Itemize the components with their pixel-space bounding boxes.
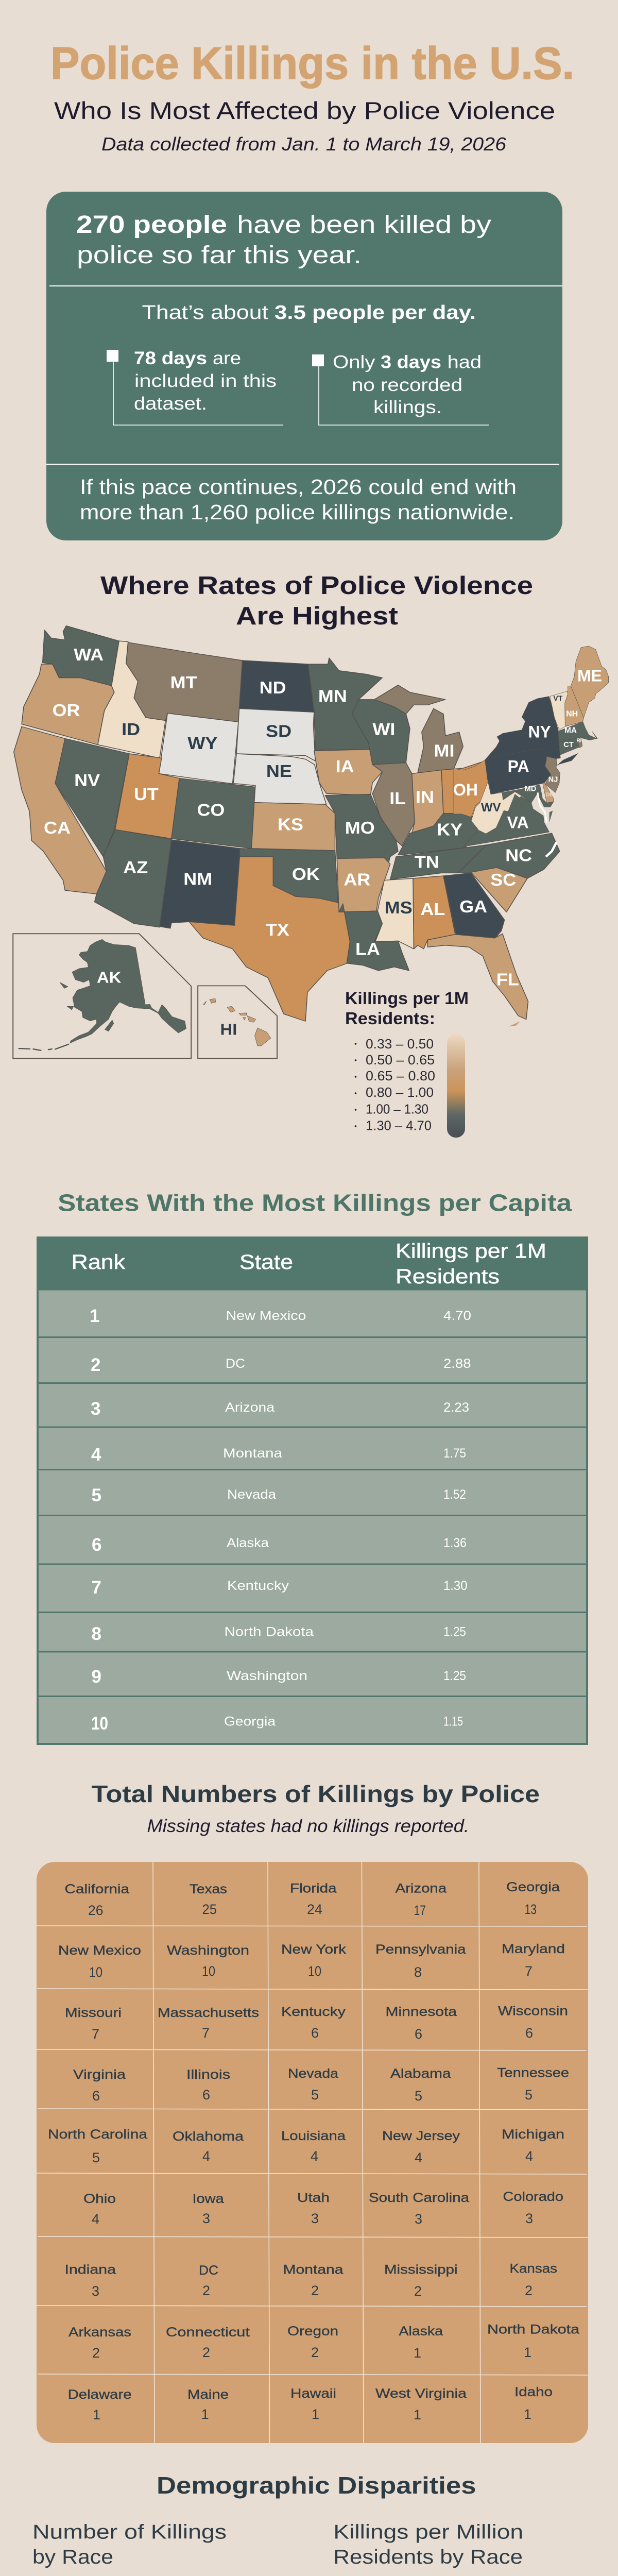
row 7 cells: Mississippi (384, 2263, 457, 2277)
inset frames (13, 934, 191, 1058)
row 9 cells: Delaware (68, 2387, 132, 2402)
row 3 cells (65, 2004, 568, 2042)
Alaska and Hawaii insets: AK (97, 968, 122, 986)
row 5: Nevada (227, 1487, 276, 1502)
row 4 cells: Alabama (390, 2066, 451, 2081)
row 3 cells: Kentucky (281, 2005, 346, 2019)
row 8: 8 (92, 1624, 101, 1644)
northeast states: MD (525, 785, 536, 793)
map legend: 0.33 – 0.50 (366, 1036, 434, 1052)
projection text: more than 1,260 police killings nationwide. (80, 500, 514, 524)
choropleth map of US: NM (183, 870, 212, 889)
map legend: 0.80 – 1.00 (366, 1084, 434, 1100)
row 3: 2.23 (443, 1400, 469, 1415)
callout: 78 days: included in this (134, 371, 277, 391)
row 9 cells: 1 (201, 2406, 209, 2422)
northeast states: NH (566, 710, 578, 719)
table: states with most killings per capita (37, 1238, 588, 1744)
row 9 cells: 1 (524, 2406, 531, 2422)
projection text (80, 475, 517, 524)
row 9 cells: 1 (312, 2406, 319, 2422)
row 3 cells: 7 (92, 2026, 99, 2042)
choropleth map of US: NV (74, 771, 100, 790)
row 9 (92, 1667, 466, 1687)
row 3 (91, 1399, 469, 1419)
row 6 cells (83, 2190, 563, 2227)
map legend: Residents: (345, 1009, 435, 1028)
northeast states: VT (553, 694, 563, 702)
row 4 cells: Tennessee (497, 2066, 569, 2080)
callout: 3 days: Only (333, 352, 375, 372)
table header: Residents (396, 1265, 500, 1288)
headline stat: 270 people (76, 211, 227, 239)
row 9 cells: Idaho (514, 2385, 553, 2399)
row 8 cells: Connecticut (166, 2325, 250, 2340)
grid: killings by state (37, 1862, 588, 2443)
row 4: 4 (91, 1445, 101, 1465)
row 8 cells: Alaska (399, 2324, 443, 2338)
row 8 cells: Oregon (287, 2324, 338, 2338)
header (50, 38, 574, 155)
row 7 cells: Montana (283, 2263, 344, 2277)
row 9: 9 (92, 1667, 101, 1687)
row 6 (92, 1535, 467, 1555)
choropleth map of US: OR (53, 701, 80, 720)
row 2 cells: 10 (308, 1963, 321, 1979)
row 2 cells: 10 (89, 1964, 102, 1980)
row 4 cells: Virginia (73, 2067, 126, 2082)
callout: 3 days: no recorded (352, 375, 462, 395)
row 4 cells: Illinois (186, 2067, 230, 2082)
row 5 cells: 4 (415, 2150, 422, 2165)
northeast states: CT (563, 741, 574, 749)
subheading: number of killings by race (32, 2521, 227, 2568)
row 1 cells: Arizona (396, 1882, 447, 1896)
row 1: New Mexico (226, 1309, 306, 1323)
northeast states: WV (481, 801, 501, 815)
choropleth map of US: IA (336, 757, 354, 776)
row 3 cells: Massachusetts (158, 2006, 259, 2020)
choropleth map of US: ID (122, 721, 140, 739)
map legend: Killings per 1M (345, 989, 469, 1008)
row 8: 1.25 (443, 1625, 466, 1639)
row 3 cells: 6 (311, 2025, 319, 2041)
row 3: Arizona (225, 1400, 274, 1415)
row 5 cells: North Carolina (48, 2127, 147, 2142)
Alaska and Hawaii insets: HI (220, 1020, 237, 1038)
row 8 cells: 1 (524, 2345, 531, 2360)
panel: summary stats (46, 192, 562, 540)
choropleth map of US: MT (170, 673, 197, 692)
row 7 (92, 1578, 468, 1598)
heading: total numbers: Missing states had no killings reported. (147, 1816, 469, 1836)
table header: Rank (71, 1251, 126, 1274)
row 5 cells: Louisiana (281, 2129, 346, 2143)
row 3 cells: Missouri (65, 2006, 122, 2020)
map legend: 1.30 – 4.70 (366, 1118, 432, 1133)
choropleth map of US: TN (415, 853, 439, 872)
per-day stat: That’s about (142, 302, 269, 324)
northeast states: NJ (548, 776, 558, 784)
row 8 cells: Arkansas (68, 2325, 131, 2340)
row 1 cells: 24 (307, 1902, 322, 1917)
row 9 cells: West Virginia (375, 2386, 467, 2401)
northeast states: OH (453, 781, 478, 799)
row 8 cells: 2 (202, 2345, 210, 2360)
subheading: killings per million by race (333, 2521, 523, 2568)
choropleth map of US: MN (318, 687, 347, 706)
choropleth map of US: FL (496, 971, 519, 989)
choropleth map of US: UT (134, 785, 159, 804)
row 8: North Dakota (225, 1625, 314, 1639)
choropleth map of US: MI (434, 742, 454, 760)
choropleth map of US: NE (266, 762, 292, 781)
choropleth map of US: ND (260, 679, 286, 697)
row 6 cells: Utah (297, 2191, 330, 2205)
callout: 78 days: dataset. (134, 394, 207, 414)
date note: Data collected from Jan. 1 to March 19, 2026 (101, 133, 507, 155)
row 9 cells (68, 2385, 553, 2422)
northeast states (453, 646, 609, 846)
callout: 78 days (107, 348, 283, 425)
map legend: 0.65 – 0.80 (366, 1068, 435, 1083)
choropleth map of US: WI (372, 721, 395, 739)
per-day stat: 3.5 people per day. (274, 302, 476, 324)
callout: 3 days: 3 days (381, 352, 441, 372)
choropleth map of US: MS (385, 899, 413, 918)
row 3 cells: Minnesota (385, 2005, 457, 2019)
row 9 cells: Hawaii (290, 2386, 336, 2401)
row 8 (92, 1624, 466, 1644)
row 9: Washington (227, 1669, 307, 1683)
per-day stat (142, 302, 476, 324)
row 8 cells (68, 2323, 579, 2361)
row 1: 1 (90, 1306, 99, 1326)
row 1 cells: 26 (88, 1903, 103, 1918)
row 5 cells: New Jersey (382, 2129, 460, 2143)
row 1 (90, 1306, 471, 1326)
row 4: 1.75 (443, 1446, 466, 1461)
row 6 cells: 3 (525, 2211, 533, 2226)
subheading: killings per million by race: Killings per Million (333, 2521, 523, 2543)
table header: Killings per 1M (396, 1240, 546, 1262)
row 4 cells: 6 (92, 2088, 100, 2104)
subheading: killings per million by race: Residents by Race (333, 2546, 523, 2568)
choropleth map of US: LA (355, 940, 380, 959)
state labels west and central: WA (74, 646, 104, 665)
callout: 3 days (312, 352, 489, 425)
row 1 cells (65, 1880, 560, 1918)
row 6: Alaska (227, 1536, 269, 1550)
heading: per capita table: States With the Most Killings per Capita (58, 1190, 572, 1216)
heading: total numbers: Total Numbers of Killings by Police (92, 1781, 540, 1807)
row 3: 3 (91, 1399, 100, 1419)
row 10: Georgia (224, 1715, 276, 1729)
row 8 cells: North Dakota (487, 2323, 579, 2337)
northeast states: ME (577, 666, 602, 685)
row 5 cells (48, 2127, 564, 2165)
row 5 cells: 5 (92, 2150, 100, 2165)
row 7 cells: 2 (202, 2283, 210, 2298)
row 10: 10 (91, 1714, 108, 1734)
row 2 cells (58, 1942, 565, 1980)
row 8 cells: 2 (92, 2345, 100, 2361)
row 7: Kentucky (227, 1579, 289, 1593)
row 5 cells: Oklahoma (173, 2129, 244, 2144)
row 1 cells: Georgia (506, 1880, 560, 1894)
northeast states: NY (528, 723, 551, 741)
subheading: number of killings by race: Number of Killings (32, 2521, 227, 2543)
northeast states: RI (576, 738, 582, 744)
row 7 cells: 2 (525, 2283, 533, 2298)
row 9 cells: 1 (414, 2407, 421, 2422)
row 6 cells: Colorado (503, 2190, 563, 2204)
row 4 cells: 6 (202, 2087, 210, 2103)
callout: 78 days: are (213, 348, 241, 368)
row 1 cells: 17 (414, 1903, 426, 1918)
row 1 cells: 25 (202, 1902, 217, 1917)
row 5: 5 (92, 1485, 101, 1505)
table header: State (239, 1251, 293, 1274)
Alaska and Hawaii insets (19, 939, 271, 1050)
subheading: number of killings by race: by Race (32, 2546, 113, 2568)
row 10 (91, 1714, 463, 1734)
choropleth map of US: IL (389, 790, 406, 808)
subtitle: Who Is Most Affected by Police Violence (54, 97, 555, 124)
row 2 cells: Pennsylvania (375, 1942, 466, 1957)
row 6 cells: 3 (311, 2211, 319, 2226)
northeast states: VA (507, 813, 529, 832)
row 2 cells: New York (281, 1942, 347, 1957)
choropleth map of US (13, 626, 609, 1058)
northeast states: DE (546, 792, 554, 798)
row 5 cells: Michigan (502, 2127, 564, 2142)
choropleth map of US: SC (490, 871, 516, 890)
callout: 78 days: 78 days (134, 348, 207, 368)
choropleth map of US: MO (345, 819, 375, 838)
heading: map: Are Highest (236, 602, 398, 630)
map legend (345, 989, 469, 1138)
row 7 cells: 2 (311, 2283, 319, 2298)
title: Police Killings in the U.S. (50, 38, 574, 89)
row 4: Montana (223, 1446, 282, 1461)
row 5 cells: 4 (202, 2148, 210, 2164)
row 4 cells: 5 (311, 2087, 319, 2103)
row 7 cells: 3 (92, 2283, 99, 2299)
choropleth map of US: SD (266, 722, 291, 741)
projection text: If this pace continues, 2026 could end with (80, 475, 517, 499)
row 2: DC (226, 1357, 245, 1371)
row 7 cells: Kansas (510, 2262, 557, 2276)
heading: map (100, 572, 533, 630)
row 5 cells: 4 (525, 2148, 533, 2164)
row 2: 2.88 (443, 1357, 471, 1371)
row 6 cells: South Carolina (369, 2191, 469, 2205)
row 2 cells: 8 (414, 1964, 422, 1980)
headline stat: have been killed by (237, 211, 491, 239)
heading: total numbers (92, 1781, 540, 1836)
choropleth map of US: NC (505, 846, 532, 865)
row 7: 7 (92, 1578, 101, 1598)
table header (37, 1238, 588, 1290)
northeast states: PA (508, 757, 529, 775)
callout: 3 days: killings. (373, 397, 442, 417)
row 6 cells: Iowa (193, 2192, 224, 2206)
row 6: 6 (92, 1535, 101, 1555)
row 7 cells (65, 2262, 557, 2299)
headline stat: police so far this year. (77, 242, 362, 269)
row 1 cells: Florida (290, 1882, 337, 1896)
choropleth map of US: CA (44, 819, 71, 838)
map legend: 0.50 – 0.65 (366, 1052, 435, 1067)
row 3 cells: Wisconsin (498, 2004, 568, 2019)
heading: demographic disparities: Demographic Disparities (157, 2472, 476, 2499)
choropleth map of US: GA (459, 897, 487, 917)
row 4 cells: Nevada (288, 2066, 338, 2081)
row 10: 1.15 (443, 1715, 463, 1729)
row 1 cells: Texas (190, 1882, 227, 1896)
northeast states: MA (564, 726, 577, 735)
choropleth map of US: AZ (123, 859, 148, 877)
choropleth map of US: AR (344, 871, 370, 889)
row 2 cells: Washington (167, 1943, 249, 1958)
row 4 cells: 5 (415, 2088, 422, 2104)
row 3 cells: 6 (525, 2025, 533, 2041)
row 1 cells: California (65, 1882, 129, 1896)
choropleth map of US: KY (437, 821, 462, 839)
map legend: 1.00 – 1.30 (366, 1101, 428, 1117)
row 1 cells: 13 (525, 1902, 537, 1917)
row 2 cells: Maryland (502, 1942, 565, 1956)
row 1: 4.70 (443, 1309, 471, 1323)
row 5 cells: 4 (311, 2148, 318, 2164)
headline stat (76, 211, 491, 269)
row 2 cells: 10 (202, 1963, 215, 1979)
row 6: 1.36 (443, 1536, 467, 1550)
row 5: 1.52 (443, 1487, 466, 1502)
choropleth map of US: IN (416, 788, 434, 807)
row 3 cells: 7 (202, 2025, 210, 2041)
row 4 (91, 1445, 466, 1465)
choropleth map of US: TX (266, 921, 289, 939)
row 9 cells: Maine (187, 2387, 229, 2402)
choropleth map of US: CO (197, 801, 225, 820)
row 9 cells: 1 (93, 2407, 100, 2422)
row 8 cells: 2 (311, 2345, 319, 2360)
choropleth map of US: AL (420, 900, 445, 919)
row 2: 2 (91, 1355, 100, 1375)
row 7 cells: Indiana (65, 2263, 116, 2277)
row 6 cells: 3 (415, 2211, 422, 2227)
row 4 cells: 5 (525, 2087, 533, 2103)
choropleth map of US: WY (187, 734, 217, 753)
choropleth map of US: OK (292, 865, 320, 884)
row 8 cells: 1 (414, 2345, 421, 2361)
callout: 3 days: had (448, 352, 482, 372)
row 9: 1.25 (443, 1669, 466, 1683)
choropleth map of US: KS (278, 816, 303, 834)
row 2 cells: 7 (525, 1963, 533, 1979)
row 7 cells: 2 (414, 2283, 422, 2299)
row 4 cells (73, 2066, 569, 2104)
row 6 cells: 4 (92, 2211, 99, 2227)
heading: map: Where Rates of Police Violence (100, 572, 533, 600)
row 2 (91, 1355, 471, 1375)
row 3 cells: 6 (415, 2026, 422, 2042)
row 7: 1.30 (443, 1579, 468, 1593)
row 7 cells: DC (199, 2263, 218, 2278)
row 6 cells: 3 (202, 2211, 210, 2226)
row 5 (92, 1485, 466, 1505)
row 6 cells: Ohio (83, 2192, 116, 2206)
row 2 cells: New Mexico (58, 1943, 141, 1958)
